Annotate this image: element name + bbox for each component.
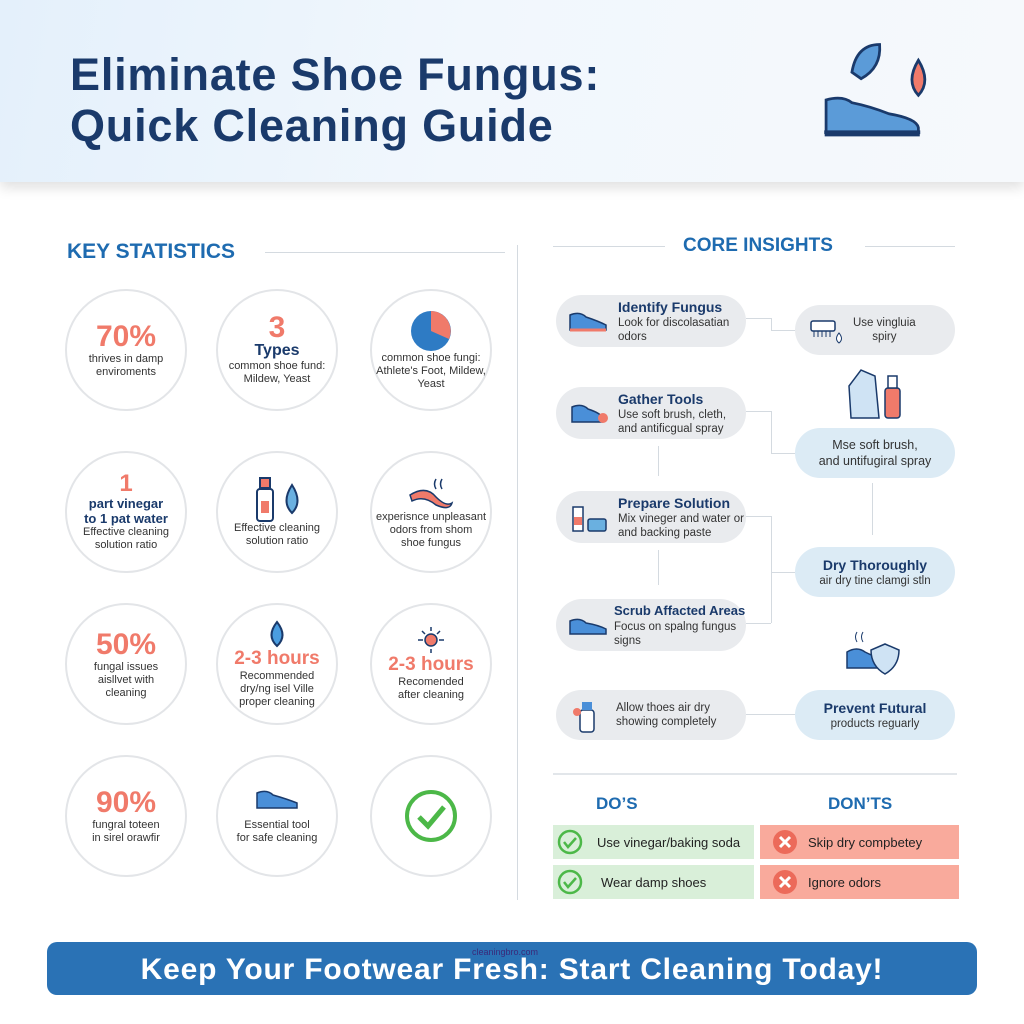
stat 2-3 hours sun: Recomended [398,676,464,688]
stat 2-3 hours sun [370,603,492,725]
pill: prepare solution [556,491,746,543]
stat ratio: to 1 pat water [84,511,168,526]
pill: identify fungus: Look for discolasatian [618,317,729,329]
title: Eliminate Shoe Fungus: [70,49,600,100]
pill: allow dry: Allow thoes air dry [616,702,710,714]
pill: allow dry: showing completely [616,716,716,728]
header band [0,0,1024,182]
pill: prevent future [795,690,955,740]
pill: dry thoroughly: air dry tine clamgi stln [819,575,931,587]
dont row 2 [760,865,959,899]
stat 2-3 hours drop: proper cleaning [239,696,315,708]
stat 2-3 hours drop [216,603,338,725]
stat 50%: fungal issues [94,660,158,672]
stat 2-3 hours sun: 2-3 hours [388,654,474,675]
stat 90%: fungral toteen [92,819,160,831]
stat shoe tool: Essential tool [244,819,310,831]
stat shoe tool [216,755,338,877]
icon: cloth and spray [848,369,901,419]
pill: dry thoroughly: Dry Thoroughly [823,557,927,573]
stat 2-3 hours drop: Recommended [240,670,314,682]
title: Quick Cleaning Guide [70,100,554,151]
stat 50% [65,603,187,725]
dont row 2: Ignore odors [808,874,881,890]
pill: use vinegar spray [795,305,955,355]
stat 2-3 hours drop: dry/ng isel Ville [240,682,314,694]
heading: key statistics: KEY STATISTICS [67,240,235,263]
stat 70%: enviroments [96,366,156,378]
pill: gather tools: Use soft brush, cleth, [618,409,726,421]
pill: identify fungus: odors [618,331,647,343]
pill: scrub: signs [614,635,641,647]
stat 90% [65,755,187,877]
footer banner [47,942,977,995]
dont row 1 [760,825,959,859]
do row 2 [553,865,754,899]
pill: dry thoroughly [795,547,955,597]
stat pie: Yeast [417,378,445,390]
footer banner: Keep Your Footwear Fresh: Start Cleaning Today! [141,953,883,986]
stat 70%: thrives in damp [89,353,163,365]
stat 90%: 90% [96,786,156,819]
stat bottle drop: Effective cleaning [234,522,320,534]
pill: soft brush: Mse soft brush, [832,438,918,452]
pill: prepare solution: and backing paste [618,527,711,539]
pill: gather tools [556,387,746,439]
pill: use vinegar spray: Use vingluia [853,317,916,329]
pill: scrub: Focus on spalng fungus [614,621,736,633]
stat 3 types [216,289,338,411]
stat ratio: Effective cleaning [83,526,169,538]
stat 50%: aisllvet with [98,674,154,686]
stat 50%: cleaning [106,686,146,698]
stat 70% [65,289,187,411]
stat check [370,755,492,877]
pill: identify fungus [556,295,746,347]
stat ratio: part vinegar [89,496,163,511]
stat ratio: solution ratio [95,539,157,551]
stat pie: common shoe fungi: [381,352,481,364]
icon: shoe with leaf and drop [824,43,926,136]
do row 1 [553,825,754,859]
pill: prepare solution: Mix vineger and water or [618,513,744,525]
title [70,49,600,151]
stat grid [65,289,492,877]
stat shoe tool: for safe cleaning [237,832,317,844]
pill: scrub: Scrub Affacted Areas [614,603,745,618]
pill: prevent future: Prevent Futural [824,700,926,716]
stat bottle drop [216,451,338,573]
stat 3 types: Types [254,342,300,359]
pill: allow dry [556,690,746,740]
stat 3 types: 3 [269,311,285,344]
divider [517,245,518,900]
dont row 1: Skip dry compbetey [808,834,922,850]
pill: scrub [556,599,746,651]
stat ratio: 1 [119,470,133,497]
stat odors: shoe fungus [401,536,461,548]
stat bottle drop: solution ratio [246,534,308,546]
stat odors [370,451,492,573]
stat 50%: 50% [96,628,156,660]
stat 2-3 hours drop: 2-3 hours [234,648,320,668]
connectors [746,318,771,319]
pill: prevent future: products reguarly [831,718,919,730]
stat odors: odors from shom [390,524,472,536]
stat 3 types: Mildew, Yeast [244,373,310,385]
do row 1: Use vinegar/baking soda [597,834,740,850]
stat 70%: 70% [96,320,156,353]
stat 3 types: common shoe fund: [229,360,325,372]
stat ratio [65,451,187,573]
pill: use vinegar spray: spiry [872,331,896,343]
stat pie [370,289,492,411]
pill: soft brush [795,428,955,478]
heading: don'ts: DON’TS [828,794,892,813]
pill: identify fungus: Identify Fungus [618,299,722,315]
stat 2-3 hours sun: after cleaning [398,689,464,701]
pill: gather tools: Gather Tools [618,391,703,407]
pill: gather tools: and antificgual spray [618,423,723,435]
heading: do's: DO’S [596,794,638,813]
stat 90%: in sirel orawfir [92,832,160,844]
stat pie: Athlete's Foot, Mildew, [376,364,486,376]
icon: shoe shield [846,632,900,675]
pill: prepare solution: Prepare Solution [618,495,730,511]
watermark: cleaningbro.com [472,947,538,957]
stat odors: experisnce unpleasant [376,510,486,522]
pill: soft brush: and untifugiral spray [819,454,931,468]
heading: core insights: CORE INSIGHTS [683,235,833,256]
do row 2: Wear damp shoes [601,874,706,890]
